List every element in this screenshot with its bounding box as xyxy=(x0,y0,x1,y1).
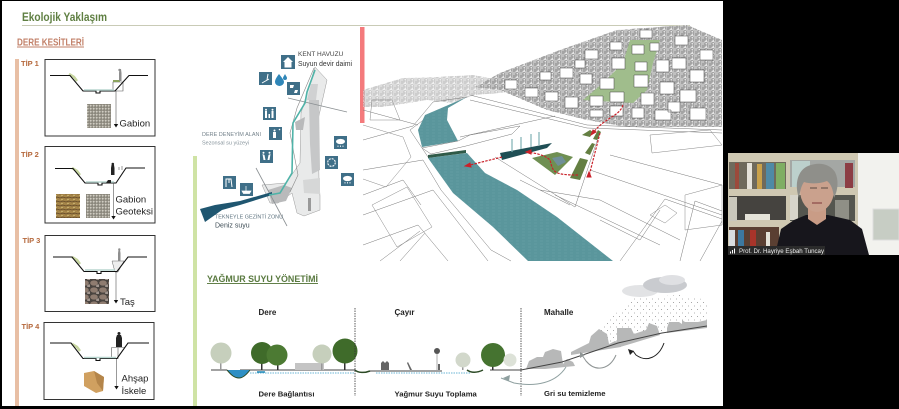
icon: house xyxy=(281,55,295,69)
section labels top: Çayır xyxy=(394,308,415,317)
arrow: to river xyxy=(466,157,502,166)
label: tekneyle gezinti zonu: Deniz suyu xyxy=(215,222,250,230)
panel: tip 4: İskele xyxy=(122,386,146,397)
arrow: planter channel xyxy=(589,133,600,176)
section labels bottom xyxy=(258,389,606,398)
panel: tip 2: TİP 2 xyxy=(21,150,39,159)
arrow head: grey water 1 xyxy=(503,375,510,381)
title: Ekolojik Yaklaşım xyxy=(22,12,107,24)
label: tekneyle gezinti zonu xyxy=(215,214,283,230)
arrow head: grey water 2 xyxy=(580,352,585,358)
aerial view xyxy=(363,25,722,261)
framed picture xyxy=(873,209,899,240)
panel: tip 4: Ahşap xyxy=(122,374,148,384)
panel: tip 1 xyxy=(21,59,155,136)
section labels top: Mahalle xyxy=(544,308,574,317)
hillside buildings xyxy=(475,25,722,127)
subsurface water xyxy=(250,372,471,374)
accent bar: red xyxy=(360,27,364,123)
bookshelf xyxy=(728,153,858,255)
neighbourhood buildings xyxy=(526,320,707,369)
ground line xyxy=(211,326,707,371)
panel: tip 4 xyxy=(22,322,154,400)
map: stream line xyxy=(269,70,315,195)
panel: tip 2: Gabion xyxy=(116,194,146,206)
icon: cloud xyxy=(341,173,354,186)
icon: family xyxy=(263,107,276,120)
label: dere deneyim alani xyxy=(202,131,261,146)
heading: dere kesitleri: DERE KESİTLERİ xyxy=(17,36,84,48)
garden xyxy=(532,152,573,175)
icon: rain cloud xyxy=(334,136,347,149)
cloud xyxy=(622,275,687,297)
arrow head: grey water 3 xyxy=(628,349,634,355)
foreground buildings on hill xyxy=(505,30,713,120)
name tag xyxy=(728,246,825,255)
icon: person with water xyxy=(269,127,282,140)
label: tekneyle gezinti zonu: TEKNEYLE GEZİNTİ ZONU xyxy=(215,214,283,220)
arrow: grey water 1 xyxy=(501,367,566,384)
label: dere deneyim alani: Sezonsal su yüzeyi xyxy=(202,140,249,146)
bridge xyxy=(422,126,520,154)
icon: shower xyxy=(259,72,272,85)
panel: tip 1: Gabion xyxy=(120,118,150,130)
heading: yagmur suyu yonetimi: YAĞMUR SUYU YÖNETİMİ xyxy=(207,273,318,285)
icon: water drops xyxy=(275,74,287,86)
presenter xyxy=(775,164,869,255)
water feature xyxy=(500,143,552,160)
green corridor xyxy=(583,40,660,103)
icon: cycle xyxy=(325,156,338,169)
section diagram: rainwater xyxy=(210,275,707,396)
arrow: hill runoff xyxy=(593,105,623,133)
panel: tip 2 xyxy=(21,146,155,223)
divider lines xyxy=(355,308,521,396)
video panel xyxy=(728,153,899,255)
slide background xyxy=(2,1,723,406)
name tag: Prof. Dr. Hayriye Eşbah Tuncay xyxy=(739,248,825,255)
panel: tip 2: Geoteksi xyxy=(116,206,153,218)
section labels bottom: Yağmur Suyu Toplama xyxy=(394,390,478,398)
building in meadow xyxy=(295,363,324,370)
label: kent havuzu: KENT HAVUZU xyxy=(298,51,344,58)
arrow head: garden flow xyxy=(526,150,531,154)
planters xyxy=(570,158,588,180)
icon: boat xyxy=(240,183,253,196)
accent bar: green xyxy=(193,156,197,406)
label: kent havuzu: Suyun devir daimi xyxy=(298,61,352,68)
section labels top: Dere xyxy=(258,308,277,317)
arrow: to stream xyxy=(257,371,265,373)
trees xyxy=(210,338,516,370)
panel: tip 3 xyxy=(22,236,155,312)
arrow: grey water 2 xyxy=(582,355,616,368)
panel: tip 1: TİP 1 xyxy=(21,59,39,68)
icon: footprints xyxy=(287,82,300,95)
panel: tip 3: TİP 3 xyxy=(22,236,40,245)
arrow head: planter channel xyxy=(587,172,591,177)
icon: ladder xyxy=(223,176,236,189)
panel: tip 4: TİP 4 xyxy=(22,322,40,331)
section labels bottom: Dere Bağlantısı xyxy=(258,390,314,398)
label: kent havuzu xyxy=(298,51,352,68)
section labels bottom: Gri su temizleme xyxy=(544,389,606,398)
map: site plan xyxy=(200,67,347,226)
icon: people xyxy=(260,150,273,163)
arrow head: hill runoff xyxy=(591,130,596,135)
label: dere deneyim alani: DERE DENEYİM ALANI xyxy=(202,131,261,138)
rain stipple xyxy=(590,295,707,346)
map: sea channel xyxy=(200,192,272,222)
low-rise skyline xyxy=(363,75,510,107)
river xyxy=(418,97,467,147)
people xyxy=(381,361,440,370)
panel: tip 3: Taş xyxy=(120,297,135,308)
arrow head: to river xyxy=(465,163,471,167)
site linework xyxy=(363,95,722,261)
arrow: garden flow xyxy=(527,152,578,175)
section labels top xyxy=(258,308,574,317)
arrow: grey water 3 xyxy=(633,343,664,359)
accent bar: orange xyxy=(15,59,19,406)
